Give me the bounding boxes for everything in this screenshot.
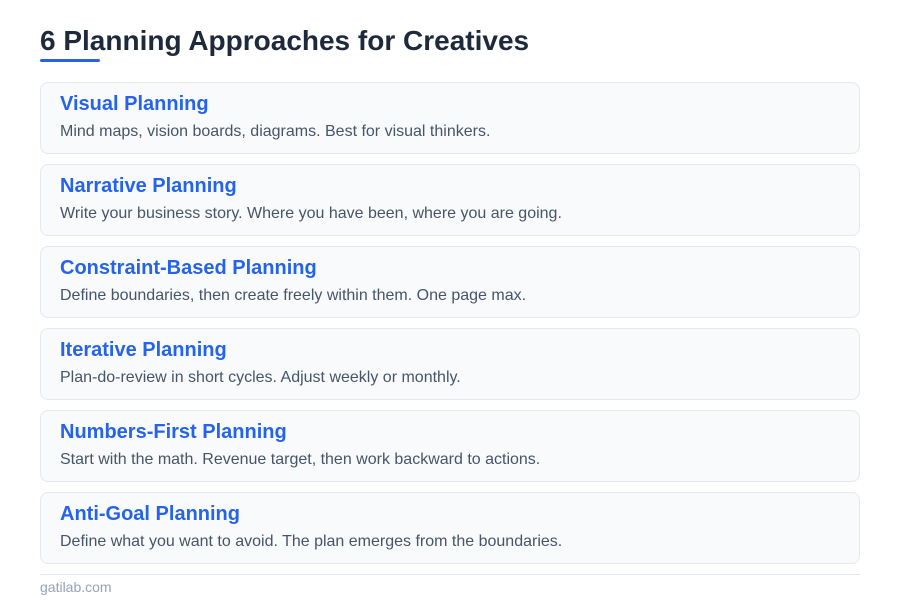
card: Iterative Planning: Iterative Planning <box>60 339 227 361</box>
card: Constraint-Based Planning: Constraint-Based Planning <box>60 257 317 279</box>
card: Visual Planning <box>40 82 860 154</box>
card: Iterative Planning: Plan-do-review in short cycles. Adjust weekly or monthly. <box>60 369 461 386</box>
card: Numbers-First Planning <box>40 410 860 482</box>
footer: gatilab.com <box>40 579 112 595</box>
card: Anti-Goal Planning: Anti-Goal Planning <box>60 503 240 525</box>
card: Narrative Planning <box>40 164 860 236</box>
card: Anti-Goal Planning <box>40 492 860 564</box>
card: Numbers-First Planning: Start with the math. Revenue target, then work backward to actions. <box>60 451 540 468</box>
card: Narrative Planning: Narrative Planning <box>60 175 237 197</box>
card: Iterative Planning <box>40 328 860 400</box>
card: Numbers-First Planning: Numbers-First Planning <box>60 421 287 443</box>
card: Visual Planning: Visual Planning <box>60 93 209 115</box>
card: Narrative Planning: Write your business story. Where you have been, where you are going. <box>60 205 562 222</box>
card: Constraint-Based Planning: Define boundaries, then create freely within them. One page max. <box>60 287 526 304</box>
card: Visual Planning: Mind maps, vision boards, diagrams. Best for visual thinkers. <box>60 123 490 140</box>
card: Anti-Goal Planning: Define what you want to avoid. The plan emerges from the boundaries. <box>60 533 562 550</box>
card: Constraint-Based Planning <box>40 246 860 318</box>
title underline <box>40 59 100 62</box>
title: 6 Planning Approaches for Creatives <box>40 25 529 56</box>
